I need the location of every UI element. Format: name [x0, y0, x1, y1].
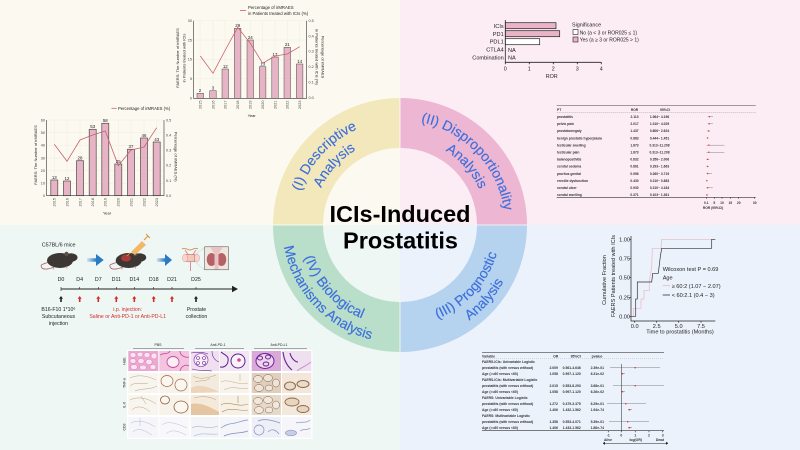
axis titles: FAERS: The Number of irMRAES — [175, 28, 180, 88]
legend: significance: No (a < 3 or ROR025 ≤ 1) — [580, 30, 637, 36]
rows: prostatitis (with versus without) — [482, 402, 533, 406]
axis titles: Time to prostatitis (Months) — [646, 330, 714, 336]
bars — [197, 28, 303, 98]
y tick labels: 0.75 — [619, 257, 630, 263]
legend — [240, 5, 309, 16]
ring label: prognostic analysis: Analysis — [466, 279, 503, 321]
rows: 1.358 — [549, 420, 558, 424]
value labels: 28 — [78, 156, 83, 160]
x axis labels: 3 — [662, 434, 664, 438]
value labels: 14 — [297, 59, 303, 64]
rows: 6.29e-01 — [591, 402, 604, 406]
axis ticks: 10 — [41, 182, 45, 186]
rows: prostatitis (with versus without) — [482, 384, 533, 388]
axis ticks: 2018 — [236, 100, 240, 109]
rows: scrotal oedema — [557, 165, 581, 169]
category labels: NA — [508, 48, 516, 54]
x axis labels: 20 — [737, 201, 741, 205]
row labels: TNF-α — [122, 378, 126, 388]
value labels: 17 — [273, 52, 278, 57]
axis ticks: 2017 — [224, 100, 228, 109]
value labels: 3 — [212, 86, 215, 91]
day labels — [58, 277, 201, 283]
day labels: D4 — [76, 277, 83, 283]
rows: 2.015 — [549, 384, 558, 388]
rows: FAERS: Univariable Logistic — [482, 396, 528, 400]
ring label: descriptive analysis: Analysis — [314, 144, 355, 188]
rows: 1.873 — [630, 150, 639, 154]
trend line — [200, 27, 300, 73]
axis ticks: 2022 — [142, 198, 146, 206]
header: pvalue — [592, 354, 602, 358]
column headers — [133, 343, 307, 348]
axis titles: Percentage of irMRAES (%) — [174, 132, 178, 182]
x axis labels: Alive — [604, 438, 612, 442]
value labels — [52, 118, 160, 181]
axis titles — [33, 125, 178, 216]
axis ticks: 0.4 — [308, 34, 314, 38]
x axis labels: 10 — [720, 201, 724, 205]
header: 95%CI — [571, 354, 581, 358]
axis titles — [602, 235, 714, 336]
rows: Age (>=60 versus <60) — [482, 408, 518, 412]
axis ticks: 20 — [41, 169, 45, 173]
value labels: 21 — [285, 42, 290, 47]
axis ticks: 0.3 — [308, 50, 314, 54]
x axis labels: 0 — [504, 66, 507, 72]
axis ticks — [188, 19, 314, 109]
rows: 0.356~ 2.006 — [650, 158, 669, 162]
rows: erectile dysfunction — [557, 179, 588, 183]
rows: testicular pain — [557, 150, 579, 154]
axis ticks: 2023 — [298, 100, 302, 109]
x axis labels: 0.1 — [704, 201, 709, 205]
category labels — [472, 24, 516, 62]
x tick labels: 0.0 — [631, 324, 639, 330]
rows: 1.406 — [549, 408, 558, 412]
axis ticks: 2023 — [155, 198, 159, 206]
legend: significance: Significance — [572, 22, 601, 28]
header: PT — [557, 108, 561, 112]
title: ICIs-Induced — [329, 201, 471, 227]
axis ticks: 0 — [190, 97, 192, 101]
header: OR — [553, 354, 559, 358]
title: Prostatitis — [343, 228, 458, 254]
bars — [51, 123, 160, 196]
zero line and intervals — [607, 364, 664, 431]
axis ticks: 0.3 — [166, 148, 171, 152]
icon: mouse with tumor and syringe — [110, 234, 150, 270]
rows: prostatitis (with versus without) — [482, 420, 533, 424]
panel: disproportionality analysis background — [400, 0, 800, 225]
day labels: D14 — [129, 277, 139, 283]
rows: testicular swelling — [557, 143, 586, 147]
rows: prostatitis (with versus without) — [482, 366, 533, 370]
axis ticks: 2022 — [286, 100, 290, 109]
caption: tumor injection: B16-F10 1*10⁶ — [41, 307, 76, 313]
rows: balanoposthitis — [557, 158, 582, 162]
axis ticks: 2015 — [198, 100, 202, 109]
arrow: first step — [87, 254, 104, 266]
column headers: Anti-PD-L1 — [270, 343, 288, 347]
row labels: CD3 — [122, 423, 126, 431]
x axis labels: 5 — [713, 201, 715, 205]
arrow: alive to dead — [603, 442, 668, 445]
rows: prostatomegaly — [557, 129, 582, 133]
day labels: D25 — [191, 277, 201, 283]
x axis labels — [604, 434, 664, 442]
value labels: 24 — [248, 35, 253, 40]
ring segment: descriptive — [273, 98, 400, 224]
rows: 0.806~ 2.624 — [650, 129, 669, 133]
rows: 0.861 — [630, 165, 639, 169]
axis ticks: 5 — [190, 77, 192, 81]
rows: 0.553-4.071 — [563, 420, 581, 424]
rows: 0.210~ 0.883 — [650, 179, 669, 183]
icon: syringe — [127, 234, 150, 256]
x axis labels: 15 — [728, 201, 732, 205]
value labels — [199, 23, 303, 93]
category labels: PD1 — [493, 32, 504, 38]
day labels: D0 — [58, 277, 64, 283]
chart: cumulative incidence curve — [602, 235, 721, 336]
icon: mouse — [41, 252, 78, 270]
axis ticks: 2020 — [117, 198, 121, 206]
ring label: disproportionality analysis: Analysis — [445, 144, 486, 188]
axis ticks: 2019 — [249, 100, 253, 109]
row labels: IL-6 — [122, 402, 126, 408]
x tick labels: 2.5 — [653, 324, 661, 330]
curve: age under 60 — [631, 239, 715, 316]
legend: Wilcoxon test P = 0.69 — [663, 267, 718, 273]
rows: prostatitis — [557, 115, 573, 119]
legend: Age — [663, 276, 673, 282]
x axis labels: 2 — [552, 66, 555, 72]
histology figure — [122, 343, 312, 439]
rows: FAERS-ICIs: Multivariable Logistic — [482, 378, 538, 382]
rows: 0.832 — [630, 158, 639, 162]
rows: 0.444~ 1.451 — [650, 136, 669, 140]
axis ticks: 0.1 — [166, 179, 171, 183]
bars — [505, 23, 560, 45]
chart: patients treated with ICIs by year — [175, 5, 325, 118]
legend: significance: Yes (a ≥ 3 or ROR025 > 1) — [580, 38, 639, 44]
panel: prognostic analysis background — [400, 225, 800, 450]
axis ticks: 2016 — [65, 198, 69, 206]
rows: 1.433-1.562 — [563, 426, 581, 430]
confidence intervals — [706, 116, 724, 196]
axis ticks: 2020 — [261, 100, 265, 109]
rows: 0.313~11.208 — [649, 143, 670, 147]
rows: pelvic pain — [557, 122, 574, 126]
legend: Percentage of irMRAES — [248, 5, 294, 10]
legend: < 60:2.1 (0.4 − 3) — [672, 293, 715, 299]
x axis labels: 1 — [634, 434, 636, 438]
ring label: disproportionality analysis: (II) Disproportionality — [422, 112, 512, 210]
axis ticks: 2015 — [53, 198, 57, 206]
axis titles: Cumulative Fraction — [602, 255, 608, 305]
ring label: descriptive analysis: (I) Descriptive — [292, 124, 356, 190]
row: IL-6 — [128, 395, 311, 415]
value labels: 53 — [90, 124, 96, 129]
x axis labels: 2 — [648, 434, 650, 438]
caption: prostate collection: collection — [186, 314, 207, 320]
rows: pruritus genital — [557, 172, 581, 176]
forest plot: logistic regression — [482, 352, 668, 445]
header: Variable — [482, 354, 495, 358]
axis ticks: 40 — [41, 144, 45, 148]
rows — [557, 115, 670, 197]
category labels: ICIs — [494, 24, 504, 30]
axis ticks: 25 — [188, 38, 192, 42]
rows: 0.883 — [630, 136, 639, 140]
rows — [482, 360, 604, 430]
category labels: NA — [508, 56, 516, 62]
caption: tumor injection: Subcutaneous — [42, 314, 75, 320]
rows: 6.31e-02 — [591, 372, 604, 376]
axis titles: FAERS Patients treated with ICIs — [611, 235, 617, 317]
day labels: D18 — [149, 277, 159, 283]
value labels: 37 — [129, 144, 134, 149]
title — [329, 201, 471, 254]
rows: 2.39e-01 — [591, 366, 604, 370]
rows: FAERS-ICIs: Univariable Logistic — [482, 360, 535, 364]
rows: FAERS: Multivariable Logistic — [482, 414, 530, 418]
axis ticks: 2017 — [78, 198, 82, 206]
category labels: PDL1 — [490, 40, 504, 46]
value labels: 29 — [235, 23, 241, 28]
rows: benign prostatic hyperplasia — [557, 136, 602, 140]
rows: 0.479-3.375 — [563, 402, 581, 406]
rows: 0.997-1.120 — [563, 372, 581, 376]
x tick labels: 7.5 — [697, 324, 705, 330]
x axis labels: 4 — [600, 66, 603, 72]
legend — [663, 267, 721, 299]
caption: i.p. injection: Saline or Anti-PD-1 or Anti-PD-L1 — [89, 314, 166, 320]
rows: 0.996 — [630, 172, 639, 176]
axis ticks: 0.5 — [308, 19, 314, 23]
caption: tumor injection — [41, 307, 76, 327]
header — [557, 108, 670, 112]
header — [482, 354, 602, 358]
trend line — [54, 128, 157, 166]
value labels: 25 — [116, 159, 121, 164]
rows: 1.432-1.562 — [563, 408, 581, 412]
value labels: 43 — [154, 137, 160, 142]
rows: Age (>=60 versus <60) — [482, 426, 518, 430]
y tick labels: 0.50 — [619, 276, 630, 282]
x axis labels — [504, 66, 603, 80]
caption: prostate collection — [186, 307, 207, 320]
day labels: D21 — [167, 277, 177, 283]
x axis labels: 1 — [528, 66, 531, 72]
rows: 0.293~ 1.663 — [650, 165, 669, 169]
rows: 5.39e-01 — [591, 420, 604, 424]
legend: significance — [572, 22, 639, 44]
category labels: CTLA4 — [486, 48, 504, 54]
axis ticks: 0.2 — [166, 164, 171, 168]
row labels — [122, 357, 126, 431]
axis titles: Year — [248, 113, 256, 118]
y tick labels — [619, 238, 630, 320]
rows: scrotal swelling — [557, 193, 582, 197]
forest plot: preferred terms — [557, 105, 757, 210]
rows: 1.406 — [549, 426, 558, 430]
legend: Percentage of irMRAES (%) — [118, 106, 171, 111]
rows: 6.26e-02 — [591, 390, 604, 394]
icon: prostate anatomy — [182, 248, 204, 271]
value labels: 12 — [223, 64, 228, 69]
axis ticks: 2018 — [91, 198, 95, 206]
rows: 3.68e-01 — [591, 384, 604, 388]
axis ticks: 2019 — [104, 198, 108, 206]
caption: tumor injection: injection — [49, 321, 68, 327]
header: ROR — [631, 108, 639, 112]
column headers: PBS — [154, 343, 162, 347]
axis ticks: 0.0 — [166, 194, 171, 198]
value labels: 12 — [65, 176, 70, 181]
rows: 0.997-1.120 — [563, 390, 581, 394]
rows: 1.058 — [549, 372, 558, 376]
value labels: 2 — [199, 88, 202, 93]
x axis labels: 0 — [620, 434, 622, 438]
value labels: 13 — [52, 175, 57, 180]
value labels: 46 — [142, 133, 147, 138]
rows: 1.058 — [549, 390, 558, 394]
rows: 0.210~ 4.184 — [650, 186, 669, 190]
ring segment: biological mechanisms — [273, 226, 400, 352]
axis ticks: 50 — [41, 131, 45, 135]
rows: 1.010~ 4.029 — [650, 122, 669, 126]
axis titles: Percentage of irMRAES — [320, 36, 325, 79]
rows: scrotal ulcer — [557, 186, 577, 190]
timeline axis — [61, 286, 238, 292]
ring label: biological mechanisms analysis: Mechanisms Analysis — [284, 246, 372, 339]
legend: in Patients treated with ICIs (%) — [248, 11, 309, 16]
axis ticks — [41, 118, 171, 206]
rows: 0.103~ 1.361 — [650, 193, 669, 197]
caption: i.p. injection — [89, 307, 166, 320]
icon: prostate close-up — [205, 247, 228, 270]
rows: 0.930 — [630, 186, 639, 190]
rows: 0.553-8.293 — [563, 384, 581, 388]
axis titles: in Patients treated with ICIs (%) — [314, 29, 319, 86]
rows: 0.430 — [630, 179, 639, 183]
arrow: second step — [157, 254, 172, 266]
day labels: D11 — [112, 277, 121, 283]
axis ticks: 2021 — [273, 100, 277, 109]
y tick labels: 0.25 — [619, 295, 630, 301]
rows: 0.260~ 3.719 — [650, 172, 669, 176]
axis ticks: 30 — [41, 156, 45, 160]
curve: age 60 and over — [631, 239, 715, 316]
value labels: 13 — [260, 62, 266, 66]
ring label: prognostic analysis: (III) Prognostic — [436, 252, 496, 320]
x axis labels: ROR (95%CI) — [703, 206, 723, 210]
axis ticks: 60 — [41, 118, 45, 122]
rows: 1.064~ 4.196 — [650, 115, 669, 119]
row labels: H&E — [122, 357, 126, 365]
rows: 0.561-4.646 — [563, 366, 581, 370]
chart: ROR bar chart by drug class — [472, 20, 639, 80]
y tick labels: 1.00 — [619, 238, 630, 244]
axis ticks: 0.1 — [308, 80, 314, 84]
axis ticks: 0.2 — [308, 65, 314, 69]
row: TNF-α — [128, 373, 311, 393]
timeline: mouse experiment — [41, 234, 238, 327]
rows: 1.272 — [549, 402, 558, 406]
axis titles: Year — [103, 210, 112, 216]
value labels: 58 — [103, 118, 108, 123]
axis ticks: 2021 — [129, 198, 133, 206]
axis ticks: 15 — [188, 58, 192, 62]
x axis labels: -1 — [607, 434, 610, 438]
ring segment: prognostic — [400, 226, 527, 352]
rows: 2.113 — [630, 115, 639, 119]
x axis labels — [703, 201, 757, 210]
legend: ≥ 60:2 (1.07 − 2.07) — [672, 284, 721, 290]
axis titles — [175, 28, 325, 118]
axis titles: FAERS: The Number of irMRAES — [33, 125, 38, 185]
axis titles: in Patients treated with ICIs — [182, 34, 186, 82]
x axis labels: 3 — [576, 66, 579, 72]
x axis labels: ROR — [546, 74, 558, 80]
header: 95%CI — [660, 108, 670, 112]
injection arrows — [59, 296, 198, 302]
row: CD3 — [128, 417, 311, 438]
column headers: Anti-PD-1 — [210, 343, 226, 347]
rows: Age (>=60 versus <60) — [482, 372, 518, 376]
axis ticks: 2016 — [211, 100, 215, 109]
rows: 0.313~11.208 — [649, 150, 670, 154]
axis ticks: 0.4 — [166, 134, 171, 138]
x tick labels: 5.0 — [675, 324, 683, 330]
x tick labels — [631, 324, 705, 330]
label: mouse strain: C57BL/6 mice — [42, 242, 76, 248]
rows: 1.86e-74 — [591, 426, 604, 430]
category labels: Combination — [472, 55, 504, 61]
ring label: biological mechanisms analysis: (IV) Biological — [302, 256, 365, 318]
panel: descriptive analysis background — [0, 0, 400, 225]
rows: 1.437 — [630, 129, 639, 133]
panel: biological mechanisms background — [0, 225, 400, 450]
caption: prostate collection: Prostate — [187, 307, 206, 313]
caption: i.p. injection: i.p. injection: — [113, 307, 142, 313]
axis ticks: 0.5 — [166, 118, 171, 122]
axis ticks: 30 — [188, 19, 192, 23]
rows: 0.371 — [630, 193, 639, 197]
y tick labels: 0.00 — [619, 314, 630, 320]
x axis labels: 30 — [753, 201, 757, 205]
rows: Age (>=60 versus <60) — [482, 390, 518, 394]
day labels: D7 — [95, 277, 102, 283]
chart: number of irMRAES by year — [33, 106, 178, 216]
row: H&E — [128, 351, 311, 371]
rows: 2.009 — [549, 366, 558, 370]
rows: 1.94e-74 — [591, 408, 604, 412]
axis ticks: 0.0 — [308, 96, 314, 100]
rows: 2.017 — [630, 122, 639, 126]
axis ticks: 0 — [43, 194, 45, 198]
x axis labels: log(OR) — [629, 438, 642, 442]
rows: 1.873 — [630, 143, 639, 147]
x axis labels: Dead — [656, 438, 664, 442]
ring segment: disproportionality — [400, 98, 527, 224]
